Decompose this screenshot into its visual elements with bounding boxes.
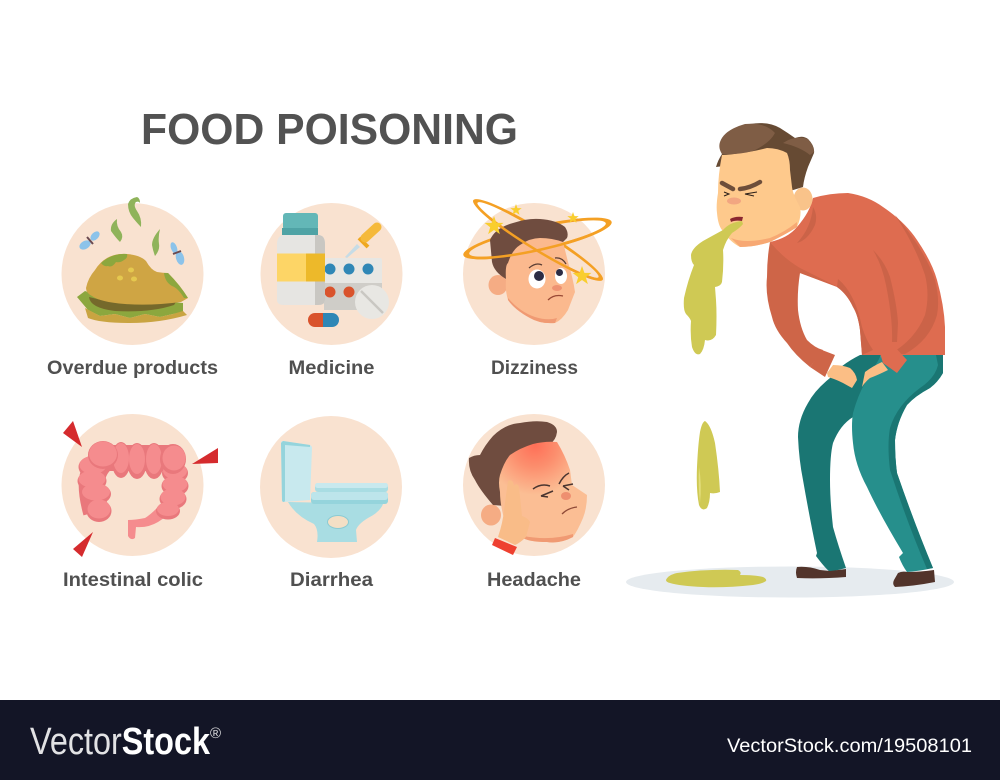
icon: pain arrows bbox=[63, 421, 218, 557]
back shoe bbox=[796, 567, 846, 578]
registered mark: ® bbox=[210, 725, 221, 742]
icon circle bbox=[260, 416, 402, 558]
hair top bbox=[719, 124, 814, 155]
leg shading bbox=[888, 355, 943, 569]
icon: pill bottle bbox=[277, 213, 325, 305]
panel: diarrhea bbox=[260, 416, 402, 591]
icon circle bbox=[260, 203, 402, 345]
arm bbox=[767, 242, 838, 367]
vomit stream bbox=[684, 221, 743, 354]
front shoe bbox=[893, 570, 935, 587]
right cuff bbox=[880, 345, 907, 373]
icon: dropper bbox=[345, 227, 377, 258]
label: Intestinal colic bbox=[63, 570, 203, 591]
icon: white tablet bbox=[355, 285, 389, 319]
face bbox=[717, 148, 801, 247]
icon: flies bbox=[78, 230, 186, 266]
chin shadow bbox=[731, 222, 797, 247]
icon: dizzy head bbox=[488, 219, 575, 323]
icon: head with headache bbox=[469, 421, 587, 542]
footer bar bbox=[0, 700, 1000, 780]
icon circle bbox=[62, 203, 204, 345]
ground shadow bbox=[626, 566, 954, 598]
icon: blister pack bbox=[324, 258, 382, 310]
icon circle bbox=[62, 414, 204, 556]
falling vomit drop bbox=[697, 421, 720, 509]
facial features bbox=[722, 182, 760, 222]
label: Headache bbox=[487, 570, 581, 591]
illustration: sick man bbox=[626, 123, 954, 597]
panel: medicine bbox=[260, 203, 402, 379]
icon: intestine bbox=[78, 441, 188, 539]
icon: stars bbox=[484, 204, 592, 284]
label: Dizziness bbox=[491, 358, 578, 379]
icon: stench wisps bbox=[111, 197, 160, 256]
icon: orbit front rings bbox=[466, 202, 611, 286]
icon: capsule bbox=[308, 313, 339, 327]
back leg bbox=[798, 353, 882, 572]
puddle of vomit bbox=[666, 570, 766, 587]
icon: orbit back rings bbox=[460, 191, 615, 289]
title: FOOD POISONING bbox=[141, 105, 518, 154]
icon: spoiled burger bbox=[77, 254, 188, 323]
icon: toilet bbox=[281, 441, 388, 542]
label: Overdue products bbox=[47, 358, 218, 379]
left cuff bbox=[810, 350, 835, 377]
sweater bbox=[770, 193, 945, 355]
front leg bbox=[852, 354, 943, 572]
hair back bbox=[716, 123, 814, 191]
ear bbox=[794, 188, 812, 210]
label: Diarrhea bbox=[290, 570, 373, 591]
panel: overdue products bbox=[47, 197, 218, 379]
panel: headache bbox=[463, 414, 605, 591]
sweater shading bbox=[797, 207, 938, 355]
logo wordmark: VectorStock bbox=[30, 721, 211, 763]
image id: VectorStock.com/19508101 bbox=[727, 736, 972, 757]
label: Medicine bbox=[288, 358, 374, 379]
icon: hand bbox=[492, 480, 530, 555]
hands bbox=[827, 362, 888, 388]
icon circle bbox=[463, 203, 605, 345]
panel: dizziness bbox=[460, 191, 615, 379]
icon circle bbox=[463, 414, 605, 556]
panel: intestinal colic bbox=[62, 414, 218, 591]
